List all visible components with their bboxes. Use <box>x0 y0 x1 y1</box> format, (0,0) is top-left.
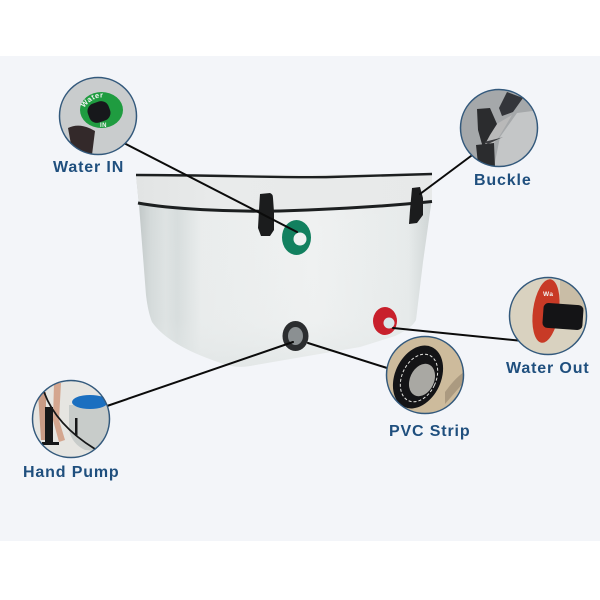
pvc strip port <box>282 321 308 351</box>
detail photo: water in: Water <box>80 94 103 107</box>
water in port <box>282 220 311 255</box>
tub body <box>136 174 432 367</box>
leader lines <box>107 141 523 406</box>
callout: pvc strip <box>383 336 470 440</box>
water out port <box>373 307 397 335</box>
detail photo: water out: Wa <box>543 291 554 298</box>
callout: hand pump <box>23 380 120 481</box>
label: Hand Pump <box>23 464 120 481</box>
label: Water Out <box>506 360 590 377</box>
callout: water in <box>53 76 138 176</box>
product: inflatable tub <box>136 174 432 367</box>
left buckle <box>258 193 274 236</box>
detail photo: water in: IN <box>100 123 107 129</box>
label: PVC Strip <box>389 423 470 440</box>
detail photo: buckle <box>460 89 540 167</box>
detail photo: pvc strip <box>387 337 463 413</box>
detail photo: hand pump <box>32 380 112 458</box>
callout: water out <box>506 277 590 377</box>
callout: buckle <box>460 89 540 189</box>
lid strap <box>138 202 432 211</box>
label: Buckle <box>474 172 532 189</box>
lid top edge <box>136 174 432 177</box>
label: Water IN <box>53 159 124 176</box>
right buckle <box>409 187 423 224</box>
detail photo: water in <box>60 78 136 154</box>
